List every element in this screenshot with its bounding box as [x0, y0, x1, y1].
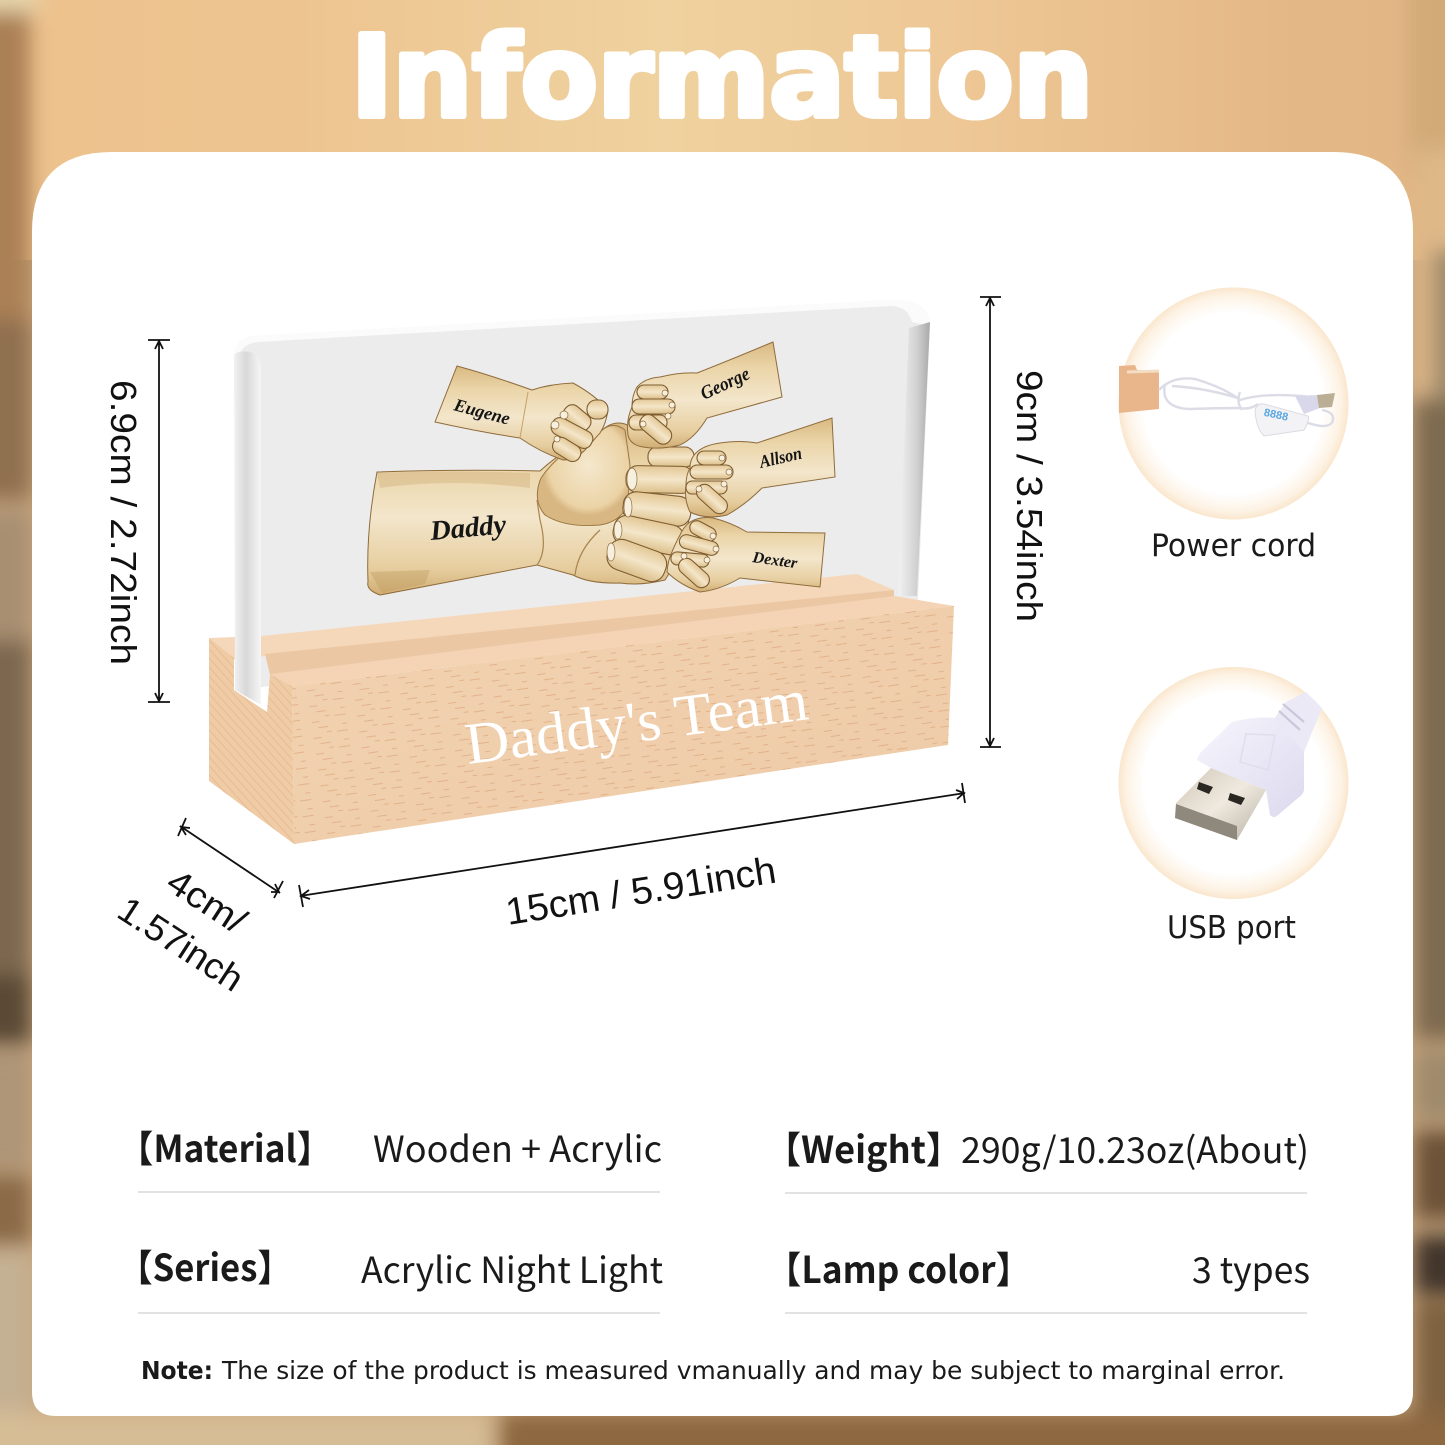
spec: material: 【Material】 — [118, 1119, 332, 1173]
title: Information — [351, 13, 1093, 143]
acrylic block — [234, 300, 930, 690]
icon: usb connector — [1175, 692, 1322, 840]
spec: weight — [765, 1120, 1309, 1174]
spec: material — [118, 1119, 662, 1173]
dimension: width: 15cm / 5.91inch — [503, 850, 779, 934]
dimension: height right — [980, 297, 1050, 747]
name: Daddy: Daddy — [428, 509, 508, 547]
hand: Allson — [686, 418, 835, 517]
icon: wood block with cord — [1119, 365, 1335, 436]
name: Dexter: Dexter — [750, 549, 799, 572]
dimension: height left: 6.9cm / 2.72inch — [103, 380, 144, 665]
hand: Eugene — [435, 366, 608, 465]
wooden base — [209, 352, 954, 844]
product: acrylic night light — [209, 300, 954, 844]
engraved base text: Daddy's Team — [461, 666, 812, 777]
icon: wood block with cord: 8888 — [1263, 407, 1289, 424]
name: George: George — [697, 363, 754, 405]
note: Note: — [141, 1356, 213, 1385]
dimension: height left — [103, 340, 170, 702]
dimension: depth: 4cm/ — [160, 860, 254, 942]
dimension: height right: 9cm / 3.54inch — [1009, 370, 1050, 622]
dimension: width — [299, 783, 965, 934]
label: usb port: USB port — [1167, 910, 1296, 946]
spec: series: 【Series】 — [118, 1238, 292, 1292]
spec: material: Wooden + Acrylic — [373, 1121, 662, 1173]
spec: lamp color: 【Lamp color】 — [766, 1240, 1031, 1294]
label: power cord: Power cord — [1151, 528, 1316, 564]
power cord circle — [1118, 288, 1348, 520]
dimension: depth: 1.57inch — [111, 888, 251, 1000]
spec: weight: 【Weight】 — [765, 1120, 962, 1174]
hand: Daddy — [368, 423, 694, 595]
name: Eugene: Eugene — [451, 394, 512, 429]
hand: George — [628, 342, 782, 448]
name: Allson: Allson — [757, 443, 804, 472]
spec: lamp color — [766, 1240, 1310, 1294]
spec: series — [118, 1238, 663, 1294]
spec: lamp color: 3 types — [1192, 1242, 1310, 1294]
hand: Dexter — [667, 518, 825, 592]
spec: weight: 290g/10.23oz(About) — [961, 1122, 1309, 1174]
dimension: depth — [111, 818, 283, 1000]
note: The size of the product is measured vmanually and may be subject to marginal error. — [221, 1356, 1285, 1385]
usb port circle — [1118, 667, 1348, 899]
spec: series: Acrylic Night Light — [361, 1242, 663, 1294]
